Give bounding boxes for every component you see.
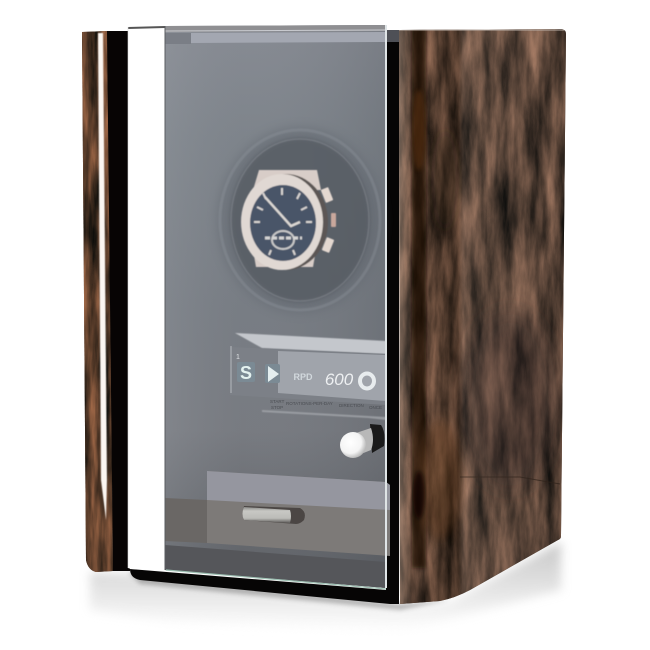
- channel number: 1: [236, 354, 240, 361]
- panel captions: [270, 399, 382, 410]
- panel captions: DIRECTION: [339, 403, 364, 408]
- glass edges: [385, 25, 387, 588]
- hour markers: [254, 188, 312, 255]
- direction icon: [360, 374, 374, 388]
- black base and right frame: [130, 30, 399, 604]
- lugs and strap stubs: [253, 170, 321, 190]
- panel captions: START: [270, 399, 285, 404]
- dial: [250, 185, 316, 261]
- panel captions: ROTATIONS-PER-DAY: [286, 401, 333, 406]
- control panel: [230, 333, 386, 420]
- panel captions: ONCE: [369, 405, 382, 410]
- black front frame: [107, 31, 130, 571]
- wood dark and light patches: [412, 28, 560, 568]
- top bright band: [165, 25, 386, 32]
- RPD readout: RPD: [293, 372, 313, 382]
- panel: white door stripe: [128, 26, 165, 571]
- bezel: [244, 174, 328, 270]
- crown and pushers: [321, 187, 333, 203]
- 600 readout: 600: [325, 370, 354, 389]
- drawer handle: [242, 506, 305, 524]
- glossy highlight: [98, 33, 107, 520]
- product photo: watch winder cabinet: [82, 25, 566, 620]
- tourbillon: [272, 231, 294, 249]
- door knob: [340, 424, 385, 458]
- watch: [241, 170, 336, 270]
- panel captions: STOP: [271, 405, 283, 410]
- panel: left wood strip: [82, 31, 113, 572]
- drawer: [165, 471, 390, 588]
- winder cradle: [217, 127, 383, 313]
- play button: [265, 364, 280, 383]
- panel: right wood side: [396, 28, 568, 606]
- hands: [265, 197, 300, 226]
- power button S: [237, 362, 255, 383]
- floor shadow and reflection: [90, 542, 561, 632]
- power button S: S: [240, 363, 252, 383]
- panel: glass door: [165, 25, 390, 589]
